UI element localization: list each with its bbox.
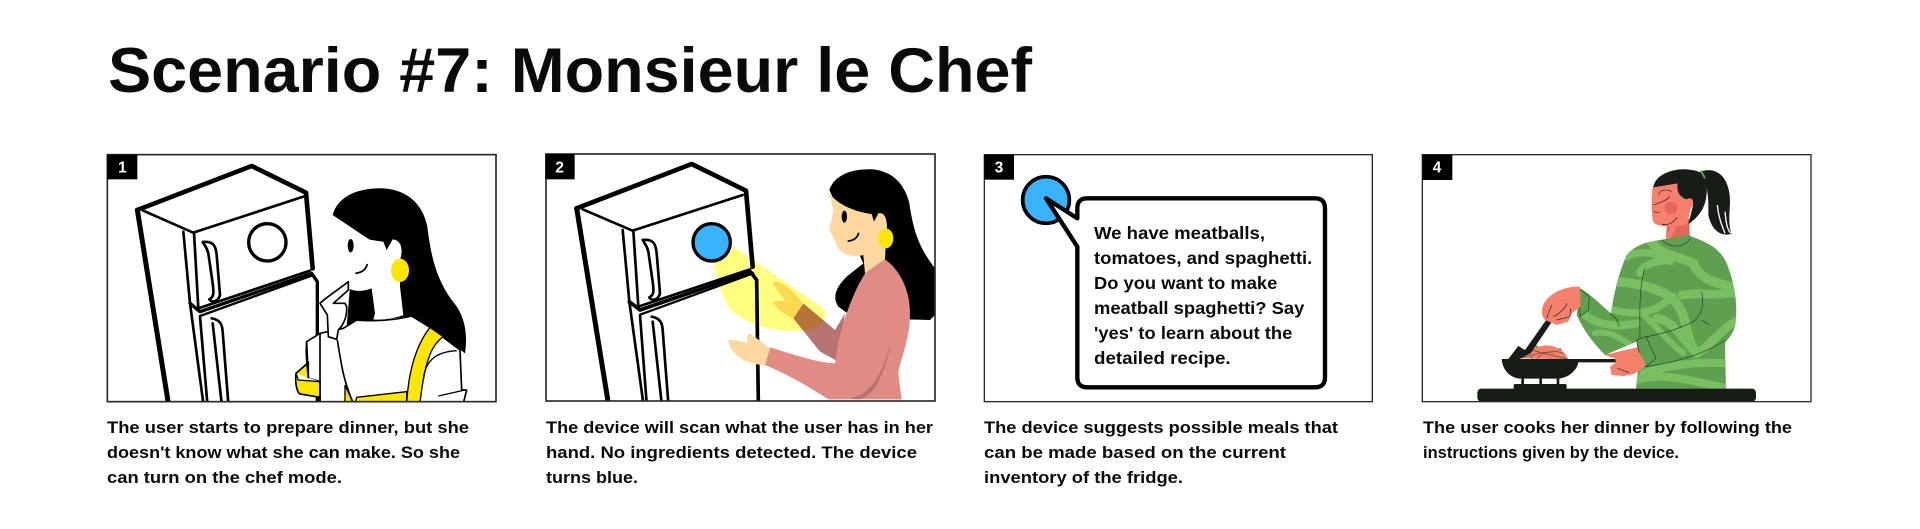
bubble text: 'yes' to learn about the bbox=[1094, 323, 1293, 343]
caption: step 3: can be made based on the current bbox=[984, 443, 1286, 462]
bubble text bbox=[1094, 223, 1312, 368]
panel 1 frame bbox=[107, 155, 496, 402]
woman cooking bbox=[1577, 169, 1738, 389]
panel 2 frame bbox=[546, 154, 935, 401]
panel 3 number badge bbox=[984, 155, 1014, 180]
burner bbox=[1514, 378, 1567, 389]
caption: step 4: instructions given by the device. bbox=[1423, 443, 1679, 462]
caption: step 3: inventory of the fridge. bbox=[984, 468, 1183, 487]
bubble text: tomatoes, and spaghetti. bbox=[1094, 248, 1312, 268]
speech bubble bbox=[1046, 198, 1325, 387]
woman holding out hands bbox=[728, 169, 935, 399]
caption: step 3: The device suggests possible meals that bbox=[984, 418, 1338, 437]
caption: step 1 bbox=[107, 418, 469, 487]
caption: step 1: The user starts to prepare dinner, but she bbox=[107, 418, 469, 437]
bubble text: We have meatballs, bbox=[1094, 223, 1265, 243]
noodles bbox=[1518, 345, 1568, 359]
panel 4 number badge: 4 bbox=[1433, 159, 1442, 176]
bubble text: Do you want to make bbox=[1094, 273, 1278, 293]
panel 3 number badge: 3 bbox=[995, 159, 1003, 176]
title: Scenario #7: Monsieur le Chef bbox=[108, 36, 1033, 106]
panel 4: user cooking bbox=[1422, 155, 1811, 402]
caption: step 2: The device will scan what the user has in her bbox=[546, 418, 933, 437]
panel 4 frame bbox=[1422, 155, 1811, 402]
bubble text: meatball spaghetti? Say bbox=[1094, 298, 1305, 318]
hands bbox=[1542, 287, 1646, 376]
fridge with blue device bbox=[577, 164, 758, 403]
icon: blue device bbox=[1023, 177, 1069, 223]
caption: step 3 bbox=[984, 418, 1338, 487]
caption: step 1: can turn on the chef mode. bbox=[107, 468, 342, 487]
panel 2: device scanning hand bbox=[545, 154, 935, 403]
pan bbox=[1502, 359, 1617, 379]
fridge with blank device bbox=[137, 166, 317, 403]
caption: step 2: turns blue. bbox=[546, 468, 638, 487]
stove counter bbox=[1477, 389, 1756, 402]
panel 4 number badge bbox=[1422, 155, 1452, 180]
caption: step 2: hand. No ingredients detected. The device bbox=[546, 443, 917, 462]
caption: step 4 bbox=[1423, 418, 1792, 462]
caption: step 4: The user cooks her dinner by following the bbox=[1423, 418, 1792, 437]
scan beam bbox=[713, 247, 825, 331]
caption: step 2 bbox=[546, 418, 933, 487]
woman thinking bbox=[296, 188, 467, 403]
spatula bbox=[1508, 319, 1551, 359]
panel 1: user at fridge bbox=[107, 155, 496, 403]
panel 1 number badge bbox=[107, 155, 137, 179]
bubble text: detailed recipe. bbox=[1094, 348, 1231, 368]
panel 3: device speech bubble bbox=[984, 155, 1372, 402]
caption: step 1: doesn't know what she can make. So she bbox=[107, 443, 460, 462]
panel 1 number badge: 1 bbox=[118, 159, 127, 176]
panel 2 number badge: 2 bbox=[555, 159, 564, 176]
panel 2 number badge bbox=[545, 154, 575, 179]
